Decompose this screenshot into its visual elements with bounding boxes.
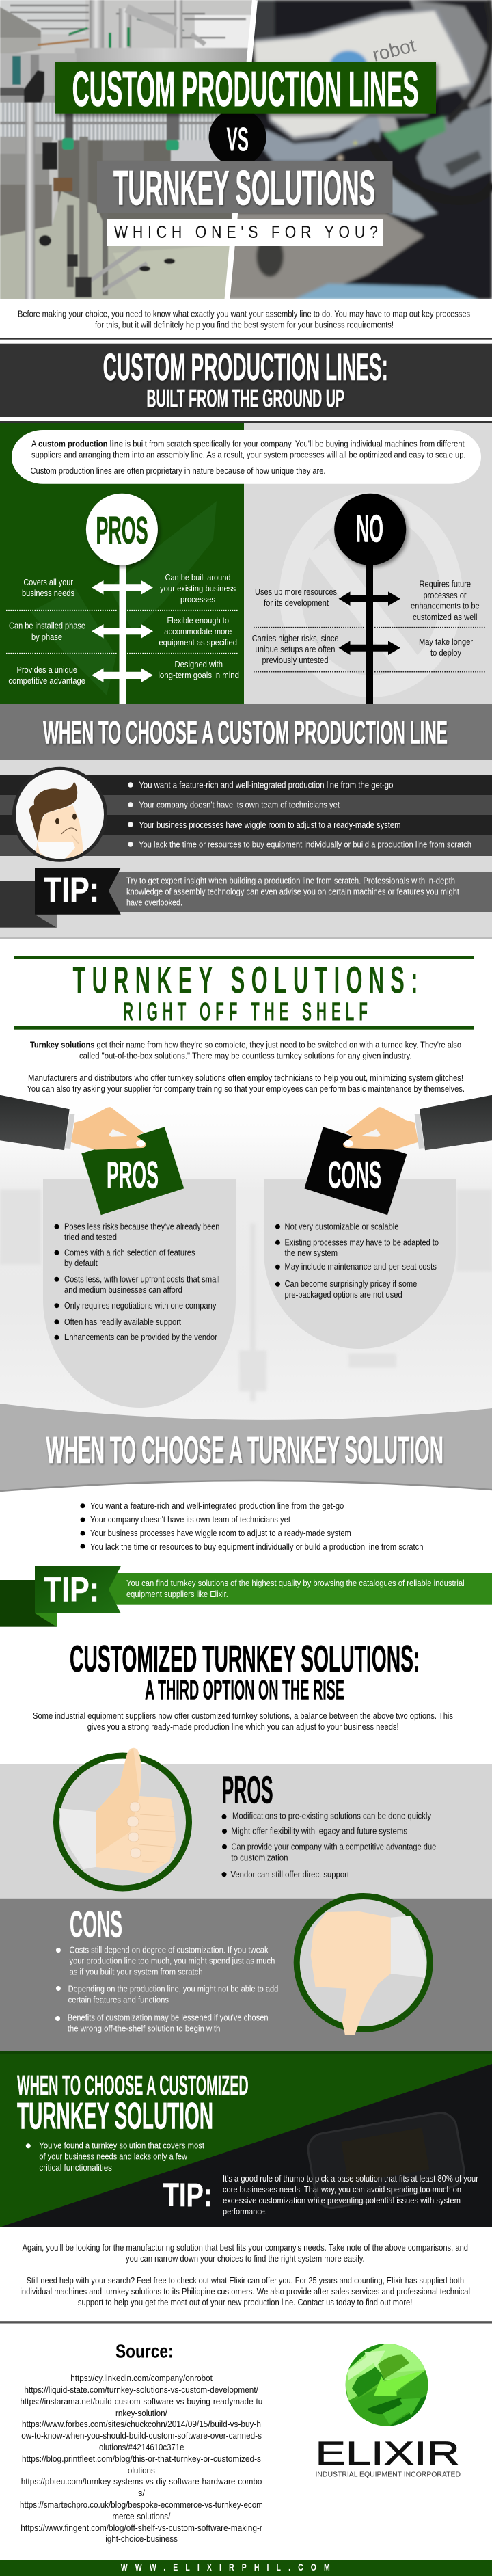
photo label: robot logo wording: robot	[370, 34, 418, 66]
list: pros left and right: Designed with	[175, 660, 223, 669]
list: cons left and right: Uses up more resources	[255, 587, 337, 597]
list: turnkey cons: May include maintenance and per-seat costs	[284, 1262, 437, 1272]
definition pill: Custom production lines are often proprietary in nature because of how unique they are.	[30, 466, 325, 476]
footer bar: WWW.ELIXIRPHIL.COM	[121, 2562, 330, 2573]
list: customized checklist: of your business needs and lacks only a few	[39, 2152, 188, 2162]
closing text: support to help you get the most out of your new production line. Contact us today to find out more!	[78, 2298, 412, 2307]
tip: customized turnkey: excessive customization while preventing potential issues with system	[223, 2196, 461, 2205]
turnkey intro text: called "out-of-the-box solutions." There may be countless turnkey solutions for any given industry.	[79, 1051, 411, 1060]
pros card with hand	[0, 1095, 184, 1215]
panel: custom production line pros and cons: PROS	[96, 509, 148, 552]
source list: s/	[138, 2488, 146, 2498]
definition pill: A custom production line is built from scratch specifically for your company. You'll be buying individual machines from different	[31, 439, 465, 448]
arrows: pros row 2	[92, 624, 153, 639]
list: pros left and right: Provides a unique	[16, 665, 77, 675]
panel: when to choose customized turnkey: WHEN TO CHOOSE A CUSTOMIZED	[17, 2069, 249, 2101]
tip ribbon: have overlooked.	[126, 898, 182, 907]
list: cons left and right: customized as well	[413, 613, 477, 622]
tip: customized turnkey: TIP:	[163, 2177, 212, 2214]
sources	[20, 2341, 263, 2544]
list: pros left and right: competitive advantage	[8, 676, 85, 686]
tip ribbon: turnkey	[0, 1566, 492, 1627]
list: pros left and right: Flexible enough to	[167, 616, 229, 626]
list: cons left and right: enhancements to be	[411, 602, 480, 611]
list: turnkey pros: Comes with a rich selection of features	[64, 1248, 195, 1257]
panel background: cons	[244, 423, 492, 704]
panel: customized pros	[0, 1748, 492, 1899]
arrows: pros row 1	[92, 580, 153, 595]
watermark: pros logo	[31, 501, 217, 695]
source list: https://pbteu.com/turnkey-systems-vs-diy-software-hardware-combo	[21, 2477, 262, 2486]
list: customized cons: Benefits of customization may be lessened if you've chosen	[68, 2013, 269, 2022]
checklist stripes	[0, 775, 492, 856]
list: pros left and right: your existing business	[160, 584, 236, 593]
intro text: for this, but it will definitely help you find the best system for your business requirements!	[95, 320, 394, 330]
list: pros left and right: Covers all your	[23, 578, 73, 587]
closing text	[20, 2243, 470, 2307]
logo: Elixir	[316, 2342, 461, 2479]
list: turnkey pros: by default	[64, 1259, 98, 1268]
source list: olutions/#4214610c371e	[99, 2443, 184, 2452]
customized intro text	[33, 1711, 453, 1732]
logo mark: green globe with arrows	[344, 2342, 430, 2428]
list: customized cons: the wrong off-the-shelf solution to begin with	[68, 2024, 220, 2034]
logo wordmark: ELIXIR	[316, 2436, 460, 2472]
intro text	[18, 309, 470, 330]
list: turnkey pros: and medium businesses can afford	[64, 1285, 182, 1295]
list: pros left and right: accommodate more	[164, 627, 232, 636]
list: pros left and right: Can be installed phase	[9, 621, 85, 631]
list: when to choose turnkey: You lack the time or resources to buy equipment individually or build a production line from scratch	[90, 1542, 424, 1552]
diagonal divider	[227, 0, 255, 299]
panel: custom line checklist and tip	[0, 760, 492, 939]
heading: turnkey solutions right off the shelf: TURNKEY SOLUTIONS:	[72, 958, 418, 1002]
checklist items	[128, 780, 472, 849]
list: customized pros	[221, 1812, 436, 1879]
source list: https://cy.linkedin.com/company/onrobot	[70, 2374, 213, 2383]
list: cons left and right: to deploy	[430, 648, 462, 658]
heading: turnkey solutions right off the shelf: RIGHT OFF THE SHELF	[123, 997, 368, 1026]
list: turnkey cons: Not very customizable or scalable	[284, 1222, 399, 1231]
list: turnkey cons: the new system	[284, 1248, 338, 1258]
panel background: pros	[0, 423, 244, 704]
list: customized checklist: You've found a turnkey solution that covers most	[39, 2141, 204, 2151]
list: customized pros: Vendor can still offer direct support	[231, 1870, 349, 1879]
tip: customized turnkey: core businesses needs. That way, you can avoid spending too much on	[223, 2185, 461, 2195]
tip ribbon: TIP:	[44, 870, 99, 909]
cons card with hand: CONS	[328, 1153, 381, 1196]
list: pros left and right: equipment as specified	[159, 638, 237, 647]
source list: https://www.forbes.com/sites/chuckcohn/2014/09/15/build-vs-buy-h	[22, 2419, 261, 2429]
panel: when to choose customized turnkey	[0, 2051, 492, 2227]
list: cons left and right: unique setups are often	[256, 645, 336, 654]
list: customized checklist: critical functionalities	[39, 2163, 112, 2173]
tip ribbon: turnkey: TIP:	[44, 1570, 99, 1609]
list: turnkey pros: Costs less, with lower upfront costs that small	[64, 1274, 219, 1284]
arrows: pros row 3	[92, 668, 153, 682]
list: turnkey cons: Can become surprisingly pricey if some	[284, 1279, 417, 1289]
heading: when to choose a customized turnkey solution	[17, 2069, 249, 2137]
list: when to choose turnkey	[81, 1501, 424, 1552]
list: pros left and right: business needs	[22, 589, 74, 598]
source list: https://smartechpro.co.uk/blog/bespoke-ecommerce-vs-turnkey-ecom	[20, 2500, 263, 2510]
source list: https://instarama.net/build-custom-software-vs-buying-readymade-tu	[20, 2397, 262, 2406]
icon: thumbs down	[297, 1896, 430, 2035]
list: customized cons: Depending on the production line, you might not be able to add	[68, 1984, 278, 1994]
list: customized checklist	[26, 2141, 204, 2173]
list: cons left and right: Carries higher risks, since	[252, 634, 339, 643]
icon: thumbs up	[56, 1748, 189, 1888]
panel: customized cons	[0, 1896, 492, 2051]
badge: VS circle	[209, 109, 266, 166]
list: turnkey pros: Enhancements can be provided by the vendor	[64, 1332, 217, 1342]
dark photo wedge	[0, 2064, 492, 2227]
list: turnkey pros: Often has readily available support	[64, 1317, 181, 1327]
tip ribbon: turnkey: equipment suppliers like Elixir.	[126, 1589, 228, 1599]
heading: source: Source:	[115, 2341, 174, 2361]
list: turnkey pros: tried and tested	[64, 1233, 117, 1242]
tip ribbon	[0, 868, 492, 928]
checklist items: Your business processes have wiggle room to adjust to a ready-made system	[139, 820, 400, 830]
heading: custom production lines built from the ground up	[0, 338, 492, 423]
list: customized cons: your production line too much, you might spend just as much	[70, 1957, 275, 1966]
list: customized cons	[55, 1945, 278, 2034]
logo tagline: INDUSTRIAL EQUIPMENT INCORPORATED	[316, 2471, 461, 2479]
heading: turnkey solutions right off the shelf	[14, 956, 474, 1030]
turnkey intro text	[27, 1040, 465, 1094]
heading: customized turnkey solutions	[70, 1637, 420, 1706]
pros card with hand: PROS	[107, 1153, 159, 1196]
source list: rnkey-solution/	[115, 2409, 167, 2418]
panel: customized cons: CONS	[70, 1903, 122, 1945]
list: customized pros: Can provide your company with a competitive advantage due	[231, 1842, 436, 1852]
footer bar	[0, 2560, 492, 2576]
checklist items: You want a feature-rich and well-integrated production line from the get-go	[139, 780, 393, 790]
hero banner	[0, 0, 492, 299]
heading: when to choose a custom production line	[0, 704, 492, 760]
list: turnkey cons	[275, 1222, 439, 1300]
list: customized pros: Modifications to pre-existing solutions can be done quickly	[232, 1812, 432, 1821]
list: turnkey cons: pre-packaged options are not used	[284, 1290, 402, 1300]
icon: thinking man	[14, 768, 105, 861]
list: pros left and right: processes	[180, 595, 215, 604]
list: customized cons: Costs still depend on degree of customization. If you tweak	[70, 1945, 269, 1955]
list: cons left and right: Requires future	[420, 580, 471, 589]
list: cons left and right: previously untested	[262, 656, 329, 665]
checklist items: Your company doesn't have its own team of technicians yet	[139, 800, 340, 809]
source list	[20, 2374, 263, 2544]
list: when to choose turnkey: Your business processes have wiggle room to adjust to a ready-made system	[90, 1529, 351, 1538]
list: customized cons: certain features and functions	[68, 1995, 169, 2004]
list: cons left and right: processes or	[424, 591, 466, 600]
badge: VS circle: VS	[227, 122, 249, 159]
definition pill	[12, 430, 481, 484]
tip ribbon: Try to get expert insight when building a production line from scratch. Professionals with in-depth	[126, 876, 455, 885]
list: when to choose turnkey: You want a feature-rich and well-integrated production line from the get-go	[90, 1501, 344, 1511]
subtitle: which one's for you	[107, 219, 383, 246]
list: turnkey pros: Poses less risks because they've already been	[64, 1222, 219, 1231]
cons card with hand	[304, 1095, 492, 1215]
source list: https://liquid-state.com/turnkey-solutions-vs-custom-development/	[24, 2385, 258, 2395]
customized intro text: gives you a strong ready-made production line which you can adjust to your business needs!	[87, 1722, 399, 1732]
arrows: no row 2	[339, 641, 400, 655]
signpost: pros	[86, 494, 158, 704]
arrows: no row 1	[339, 591, 400, 606]
panel: customized pros: PROS	[222, 1768, 273, 1812]
source list: ight-choice-business	[105, 2534, 178, 2544]
watermark: cons logo	[290, 503, 452, 686]
signpost: no	[334, 494, 406, 704]
source list: https://blog.printfleet.com/blog/this-or-that-turnkey-or-customized-s	[22, 2454, 261, 2464]
dotted dividers: cons	[254, 628, 485, 672]
panel: custom production line pros and cons	[0, 423, 492, 704]
customized intro text: Some industrial equipment suppliers now offer customized turnkey solutions, a balance between the above two options. This	[33, 1711, 453, 1721]
source list: olutions	[128, 2466, 155, 2476]
list: turnkey cons: Existing processes may have to be adapted to	[284, 1237, 439, 1247]
subtitle: which one's for you: WHICH ONE'S FOR YOU?	[114, 222, 378, 241]
tip: customized turnkey: performance.	[223, 2207, 267, 2216]
list: pros left and right: by phase	[31, 632, 62, 642]
panel: custom production line pros and cons: NO	[356, 507, 383, 551]
list: pros left and right: long-term goals in mind	[158, 671, 239, 680]
tip ribbon: knowledge of assembly technology can even advise you on certain machines or features you might	[126, 887, 459, 896]
list: customized pros: to customization	[231, 1853, 288, 1863]
list: customized cons: as if you built your system from scratch	[70, 1968, 203, 1977]
list: turnkey pros	[55, 1222, 219, 1342]
panel: turnkey pros and cons	[0, 1094, 492, 1422]
tip: customized turnkey	[163, 2174, 478, 2216]
source list: https://www.fingent.com/blog/off-shelf-vs-custom-software-making-r	[20, 2523, 262, 2533]
faded factory background	[0, 1190, 492, 1401]
list: pros left and right	[8, 573, 239, 686]
photo: factory line	[0, 0, 260, 299]
heading: when to choose a customized turnkey solution: TURNKEY SOLUTION	[17, 2095, 213, 2137]
pros pocket	[43, 1179, 236, 1408]
cons pocket	[264, 1179, 456, 1349]
dotted dividers: pros	[6, 611, 238, 654]
photo: robot arm	[226, 0, 492, 299]
closing text: you can narrow down your choices to find the right system more easily.	[126, 2254, 365, 2264]
heading: when to choose a turnkey solution	[0, 1404, 492, 1497]
list: turnkey pros: Only requires negotiations with one company	[64, 1301, 217, 1311]
list: pros left and right: Can be built around	[165, 573, 231, 582]
list: cons left and right: May take longer	[419, 637, 473, 647]
list: customized pros: Might offer flexibility with legacy and future systems	[231, 1826, 407, 1836]
source list: merce-solutions/	[112, 2512, 171, 2521]
tip ribbon: turnkey: You can find turnkey solutions of the highest quality by browsing the catalogues of reliable industrial	[126, 1579, 465, 1588]
list: when to choose turnkey: Your company doesn't have its own team of technicians yet	[90, 1515, 290, 1525]
list: cons left and right	[252, 580, 480, 665]
list: cons left and right: for its development	[264, 598, 329, 608]
source list: ow-to-know-when-you-should-build-custom-software-over-canned-s	[21, 2431, 262, 2441]
